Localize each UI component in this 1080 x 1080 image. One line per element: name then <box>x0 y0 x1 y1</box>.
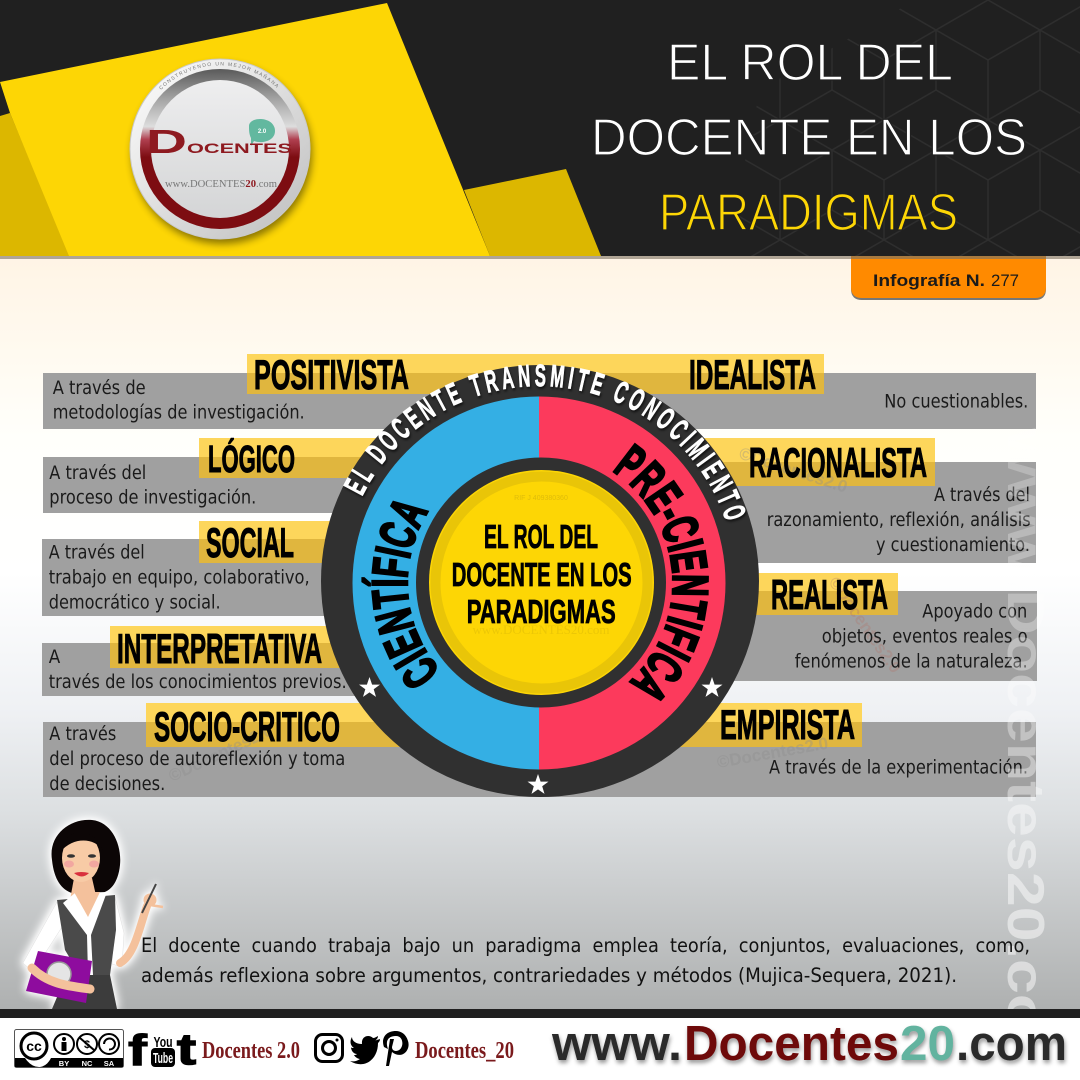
logo badge: D <box>146 123 187 160</box>
right column: racionalista: razonamiento, reflexión, análisis <box>767 510 1031 531</box>
page background <box>0 256 1080 1010</box>
header band <box>0 0 1080 259</box>
left column: social <box>49 519 310 614</box>
curved ring title: EL DOCENTE TRANSMITE CONOCIMIENTO <box>343 364 748 522</box>
left column: logico: proceso de investigación. <box>49 488 256 509</box>
icon: instagram <box>316 1034 342 1062</box>
inner dark ring <box>416 458 666 708</box>
icon: creative commons badge: BY <box>59 1059 69 1068</box>
outer dark ring <box>321 365 759 797</box>
icon: creative commons badge: $ <box>84 1039 90 1051</box>
title: EL ROL DEL <box>667 34 953 92</box>
right column: racionalista: RACIONALISTA <box>749 439 927 486</box>
right column: empirista: EMPIRISTA <box>720 701 855 748</box>
left column: interpretativa: INTERPRETATIVA <box>117 625 322 672</box>
faint watermarks: ©Docentes2.0 <box>166 721 276 786</box>
center title: DOCENTE EN LOS <box>452 556 632 593</box>
icon: youtube: Tube <box>153 1050 173 1067</box>
website url: Docentes <box>684 1017 899 1071</box>
badge: infographic number: 277 <box>991 271 1019 290</box>
website url <box>551 1017 1067 1071</box>
yellow core: RIF J 409380360 <box>514 495 568 502</box>
right column: realista <box>771 571 1028 673</box>
gray text bars <box>42 373 1037 797</box>
left column: interpretativa: A <box>49 647 61 668</box>
icon: creative commons badge: cc <box>26 1038 42 1054</box>
right column: realista: REALISTA <box>771 571 888 618</box>
badge: infographic number <box>851 256 1046 300</box>
curved label: cientifica: CIENTÍFICA <box>361 500 437 688</box>
social handle: Docentes 2.0: Docentes 2.0 <box>202 1038 300 1064</box>
center title: EL ROL DEL <box>484 518 598 555</box>
logo badge: CONSTRUYENDO UN MEJOR MAÑANA <box>159 62 278 90</box>
right column: racionalista: y cuestionamiento. <box>876 535 1030 556</box>
left column: logico <box>49 437 295 509</box>
title: DOCENTE EN LOS <box>591 109 1027 167</box>
yellow heading bands <box>110 354 935 747</box>
website url: 20 <box>900 1017 955 1071</box>
icon: youtube <box>151 1034 175 1067</box>
icon: youtube: You <box>154 1034 172 1051</box>
curved label: pre-cientifica: PRE-CIENTIFICA <box>612 442 709 702</box>
right column: realista: fenómenos de la naturaleza. <box>795 652 1028 673</box>
bottom paragraph <box>141 934 1030 987</box>
left column: socio-critico: del proceso de autoreflexión y toma <box>49 749 345 770</box>
right column: idealista: IDEALISTA <box>689 351 816 398</box>
left column: interpretativa: través de los conocimientos previos. <box>49 672 347 693</box>
right column: empirista <box>720 701 1028 778</box>
left column: positivista: metodologías de investigación. <box>53 403 305 424</box>
right column: idealista <box>689 351 1028 413</box>
icon: pinterest <box>383 1031 409 1066</box>
left column: social: trabajo en equipo, colaborativo, <box>49 568 310 589</box>
central ring diagram <box>321 364 759 797</box>
logo badge <box>126 58 318 250</box>
social handle: Docentes_20: Docentes_20 <box>415 1038 514 1064</box>
left column: social: SOCIAL <box>206 519 294 566</box>
faint watermarks: ©Docentes2.0 <box>715 734 830 772</box>
left column: interpretativa <box>49 625 347 693</box>
faint watermarks: ©Docentes2.0 <box>737 444 850 497</box>
left column: positivista: POSITIVISTA <box>254 351 409 398</box>
faint watermarks: ©Docentes2.0 <box>825 573 905 677</box>
website url: www. <box>551 1017 682 1071</box>
center title <box>452 518 632 630</box>
left column: socio-critico <box>49 703 345 795</box>
vertical site watermark: www.Docentes20.com <box>996 427 1054 1080</box>
yellow core: www.DOCENTES20.com <box>472 622 610 637</box>
icon: creative commons badge: NC <box>82 1059 93 1068</box>
stars <box>359 677 722 794</box>
icon: twitter <box>350 1036 380 1064</box>
right column: idealista: No cuestionables. <box>884 392 1028 413</box>
bottom paragraph: además reflexiona sobre argumentos, contrariedades y métodos (Mujica-Sequera, 2021). <box>141 964 957 987</box>
badge: infographic number: Infografía N. <box>873 271 985 290</box>
left column: socio-critico: SOCIO-CRITICO <box>154 703 340 750</box>
left column: social: A través del <box>49 543 145 564</box>
icon: creative commons badge <box>14 1030 124 1068</box>
icon: tumblr: t <box>177 1025 196 1074</box>
logo badge: OCENTES <box>187 140 292 156</box>
right column: realista: Apoyado con <box>922 602 1027 623</box>
right column: realista: objetos, eventos reales o <box>822 627 1028 648</box>
logo badge: 2.0 <box>258 129 267 135</box>
teacher illustration <box>23 820 163 1009</box>
left column: logico: A través del <box>49 463 146 484</box>
faint watermarks <box>166 444 905 786</box>
right column: racionalista <box>749 439 1031 556</box>
title <box>591 34 1027 242</box>
icon: creative commons badge: SA <box>104 1059 115 1068</box>
left column: positivista: A través de <box>53 378 146 399</box>
logo badge: www.DOCENTES20.com <box>165 178 277 190</box>
blue half: cientifica <box>352 396 539 770</box>
left column: logico: LÓGICO <box>208 437 295 481</box>
icon: facebook: f <box>128 1026 147 1075</box>
right column: racionalista: A través del <box>934 485 1030 506</box>
yellow core <box>429 470 654 695</box>
website url: .com <box>956 1017 1067 1071</box>
footer background <box>0 1009 1080 1080</box>
title: PARADIGMAS <box>659 184 958 242</box>
left column: positivista <box>53 351 409 424</box>
center title: PARADIGMAS <box>467 593 616 630</box>
left column: socio-critico: de decisiones. <box>49 774 165 795</box>
red half: pre-cientifica <box>539 396 726 770</box>
left column: social: democrático y social. <box>49 593 221 614</box>
left column: socio-critico: A través <box>49 724 116 745</box>
right column: empirista: A través de la experimentación. <box>769 757 1028 778</box>
